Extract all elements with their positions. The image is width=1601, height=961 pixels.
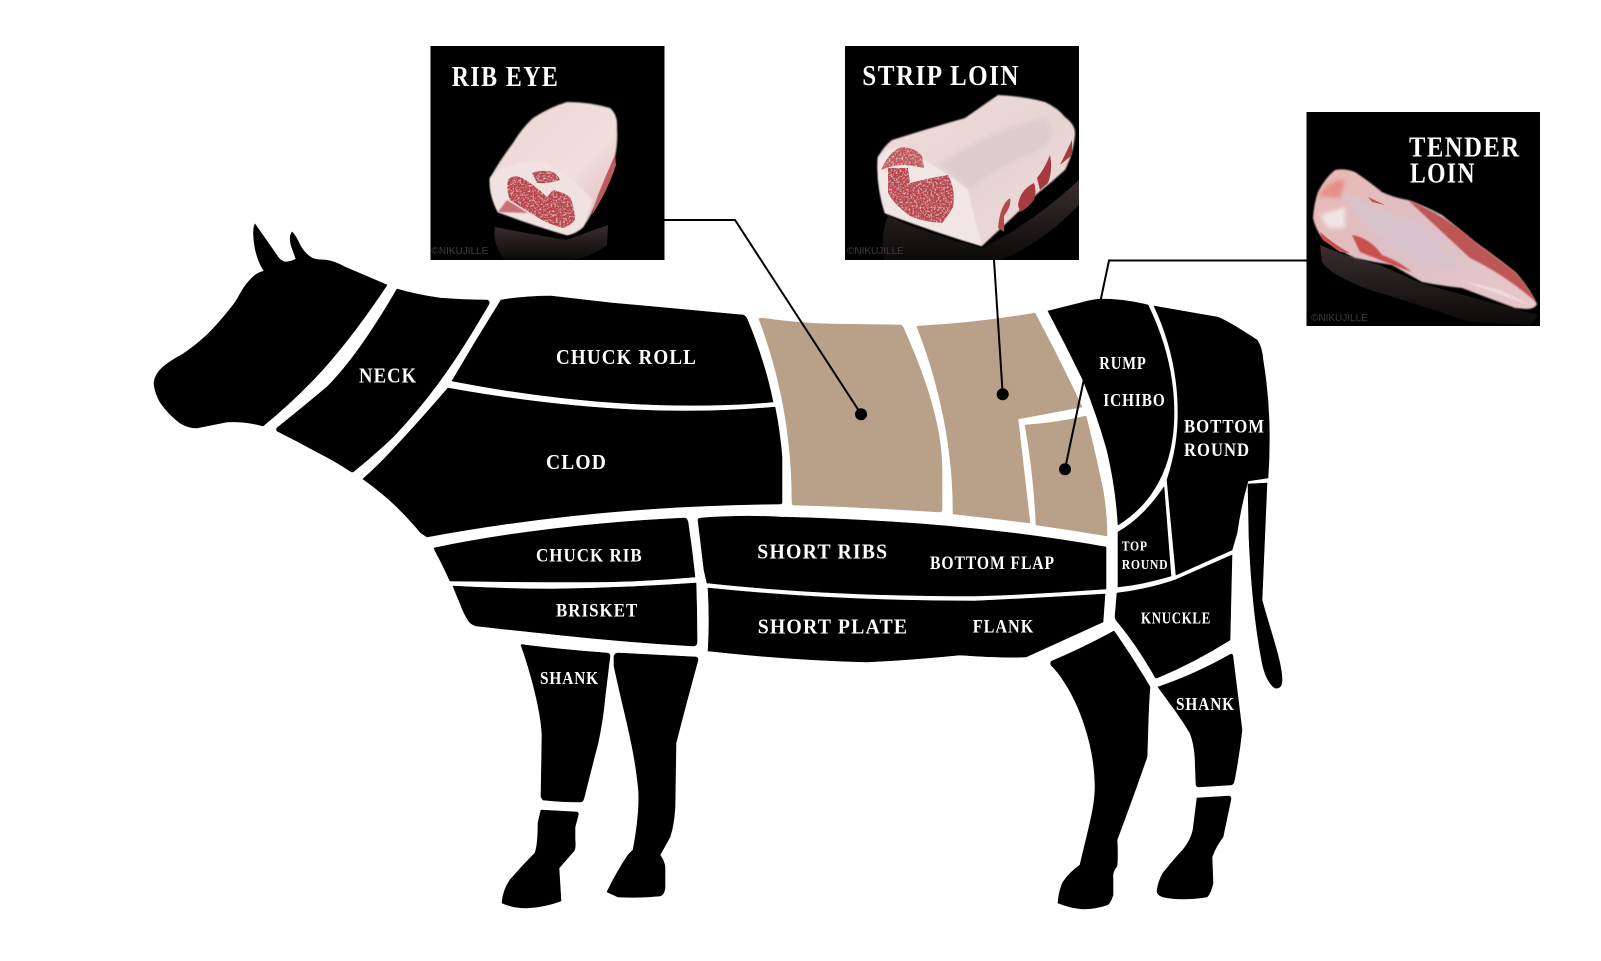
tenderloin meat — [1313, 169, 1537, 309]
cut labels: NECK — [359, 364, 417, 388]
tail — [1248, 483, 1282, 688]
title: rib eye: RIB EYE — [452, 62, 559, 93]
strip loin reflection — [883, 180, 1079, 260]
cut labels: CHUCK ROLL — [556, 345, 697, 369]
neck — [276, 289, 489, 472]
head — [154, 224, 387, 428]
bottom round — [1154, 306, 1269, 575]
cut labels: BOTTOM FLAP — [930, 554, 1055, 574]
watermark: ©NIKUJILLE — [432, 246, 489, 257]
hind leg — [1051, 631, 1150, 909]
strip loin cut — [917, 313, 1082, 523]
cut labels: ICHIBO — [1103, 390, 1166, 410]
leader line: tenderloin — [1059, 260, 1306, 475]
cow diagram — [154, 224, 1282, 909]
hind hoof — [1157, 796, 1231, 899]
highlighted cuts — [759, 313, 1107, 536]
front shank — [521, 644, 610, 802]
watermark: ©NIKUJILLE — [847, 246, 904, 257]
cut labels: RUMP — [1099, 353, 1147, 373]
leader line: strip loin — [994, 260, 1009, 400]
hind shank — [1158, 654, 1242, 787]
knuckle — [1115, 555, 1232, 678]
tenderloin reflection — [1320, 245, 1538, 325]
cut labels: SHORT PLATE — [758, 614, 908, 638]
short ribs and bottom flap — [698, 516, 1106, 596]
rib eye meat — [490, 102, 617, 235]
photo: tenderloin: LOIN — [1410, 159, 1476, 190]
brisket — [453, 583, 697, 646]
cut labels: KNUCKLE — [1141, 608, 1211, 627]
chuck rib — [434, 518, 695, 582]
photo: rib eye — [430, 46, 664, 260]
cut labels: TOP — [1122, 539, 1148, 554]
rump and ichibo — [1048, 299, 1174, 525]
cut labels: CHUCK RIB — [536, 546, 643, 567]
cut labels: BRISKET — [556, 601, 638, 622]
title: strip loin: STRIP LOIN — [862, 61, 1020, 92]
top round — [1118, 487, 1171, 587]
strip loin meat — [878, 95, 1075, 246]
rib eye reflection — [494, 225, 608, 260]
cut labels: ROUND — [1122, 557, 1168, 572]
tenderloin cut — [1025, 416, 1107, 536]
clod — [363, 388, 782, 537]
photo: strip loin — [845, 46, 1079, 260]
watermark: ©NIKUJILLE — [1311, 313, 1368, 324]
cut labels: BOTTOM — [1184, 417, 1265, 437]
photo: tenderloin — [1306, 112, 1540, 326]
red side marks — [1018, 183, 1036, 212]
cut labels: ROUND — [1184, 441, 1250, 461]
short plate and flank — [708, 588, 1105, 662]
title: tender loin: TENDER — [1409, 133, 1520, 164]
cut labels: FLANK — [973, 617, 1034, 638]
cut labels: SHORT RIBS — [757, 540, 888, 564]
cut labels — [359, 345, 1265, 714]
cut labels: CLOD — [546, 450, 607, 474]
front leg right — [607, 653, 698, 897]
chuck roll — [452, 296, 773, 405]
leader line: rib eye — [664, 220, 867, 420]
front hoof left — [502, 810, 578, 908]
cut labels: SHANK — [1176, 694, 1235, 714]
cut labels: SHANK — [540, 668, 599, 688]
rib eye cut — [759, 318, 942, 512]
